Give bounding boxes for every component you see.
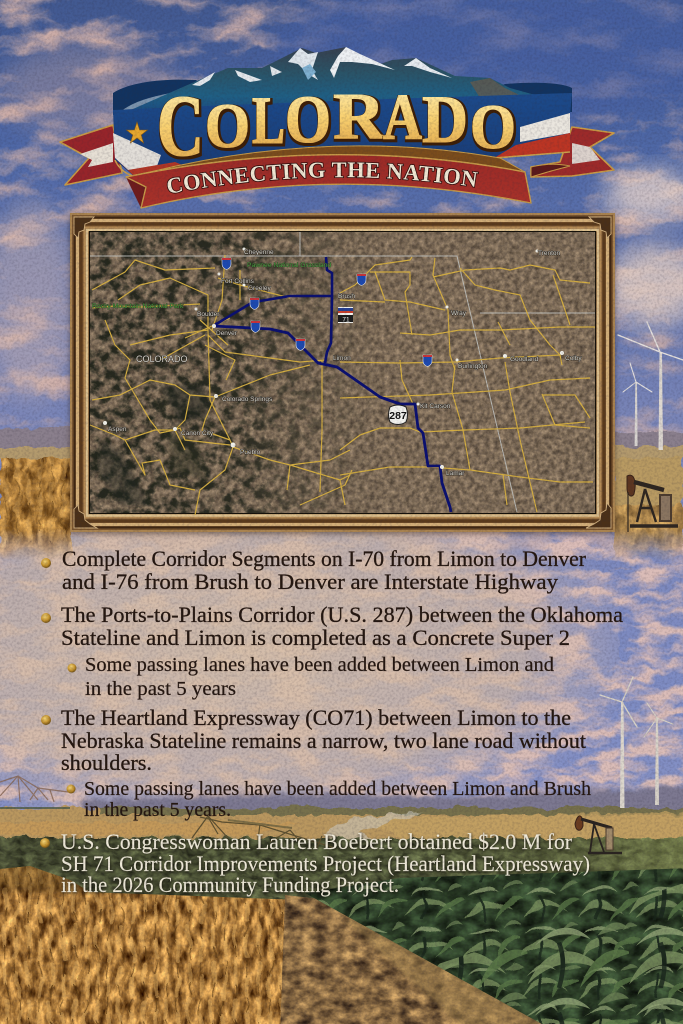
bullet 3: Heartland Expressway [41,705,586,775]
left ribbon tail [60,125,122,185]
map place labels: Colorado Springs [222,396,273,403]
blue highway route: I-70 and U.S. 287 [213,326,451,512]
yellow road network [90,255,595,515]
irrigation pivot: left [0,776,70,808]
bullet 1: corridor segments: and I-76 from Brush to Denver are Interstate Highway [62,569,558,594]
sub-bullet: passing lanes, Brush [66,778,591,821]
sub-bullet: passing lanes, Limon: in the past 5 years [85,678,236,700]
interstate shields [222,258,432,366]
map place labels: Kit Carson [420,403,451,410]
ribbon front bands [113,93,572,177]
subtitle ribbon [125,154,532,209]
bullet 4: Congressional funding: U.S. Congresswoman Lauren Boebert obtained $2.0 M for [61,829,573,854]
bullet 3: Heartland Expressway: shoulders. [61,750,152,775]
map place labels: Wray [451,310,467,317]
satellite terrain [90,232,595,513]
bullet 3: Heartland Expressway: The Heartland Expressway (CO71) between Limon to the [61,705,571,730]
map place labels: Canon City [181,430,214,437]
bullet 1: corridor segments [41,546,587,594]
distant hills [0,426,683,450]
map place labels: Denver [216,330,238,337]
map place labels: Pueblo [240,449,261,456]
map place labels: Lamar [446,470,465,477]
CO 71 route sign [338,307,353,324]
mountain [124,47,560,113]
title text: COLORADO: O [470,91,516,162]
U.S. 287 route shield [388,405,408,424]
pump jack: upper right [627,475,678,532]
bullet 4: Congressional funding: SH 71 Corridor Improvements Project (Heartland Expressway) [61,851,590,876]
map place labels: Brush [338,293,355,300]
bullet 4: Congressional funding [40,829,590,897]
sub-bullet: passing lanes, Brush: in the past 5 years. [84,799,231,821]
map place labels: Rocky Mountain National Park [92,303,184,310]
map place labels: Pawnee National Grassland [247,262,331,269]
frame corner ornaments [74,217,611,528]
blue highway route: I-76 and CO 71 [213,257,332,363]
bullet 1: corridor segments: Complete Corridor Segments on I-70 from Limon to Denver [62,546,587,571]
star icon [126,122,148,143]
title text: COLORADO: L [252,82,285,158]
title text: COLORADO [157,78,516,175]
CO 71 route sign: 71 [342,316,350,324]
sub-bullet: passing lanes, Limon [68,654,554,700]
upper wheat fields [0,458,683,560]
ribbon back curls [113,80,572,115]
title text: COLORADO: C [157,78,204,175]
subtitle text: CONNECTING THE NATION [166,162,479,194]
city markers [103,248,564,469]
map place labels: Boulder [197,311,220,318]
U.S. 287 route shield: 287 [389,410,407,422]
title banner [59,47,615,209]
bullet 2: Ports-to-Plains: Stateline and Limon is completed as a Concrete Super 2 [61,625,570,650]
irrigation pivot: center [192,816,335,850]
bullet 2: Ports-to-Plains: The Ports-to-Plains Corridor (U.S. 287) between the Oklahoma [61,602,623,627]
dirt path [280,895,542,1024]
right ribbon tail [531,127,614,177]
lower land [0,808,683,870]
map panel with ornate frame [70,213,615,532]
map place labels: Cheyenne [244,249,274,256]
map place labels: COLORADO [136,354,188,364]
corn field [300,865,683,1024]
map place labels: Goodland [510,356,539,363]
title text: COLORADO: O [205,90,250,161]
bullet 2: Ports-to-Plains [41,602,623,650]
title text: COLORADO: A [383,81,422,154]
wind turbines: lower right [600,677,673,808]
sub-bullet: passing lanes, Brush: Some passing lanes have been added between Limon and Brush [84,778,591,800]
map place labels: Colby [565,355,582,362]
map place labels: Trenton [538,250,561,257]
map place labels: Limon [333,355,351,362]
state border lines [90,232,595,512]
gold band [126,146,525,177]
title text: COLORADO: D [422,81,468,157]
map place labels: Burlington [458,363,488,370]
map place labels [92,249,582,477]
sub-bullet: passing lanes, Limon: Some passing lanes have been added between Limon and [85,654,554,676]
bullet 3: Heartland Expressway: Nebraska Stateline remains a narrow, two lane road without [61,728,586,753]
title text: COLORADO: R [333,80,386,153]
pump jack: lower field [575,816,622,853]
title text: COLORADO: O [285,81,331,157]
bullet 4: Congressional funding: in the 2026 Community Funding Project. [61,872,399,897]
map place labels: Greeley [248,285,272,292]
map place labels: Fort Collins [221,278,255,285]
wheat field [0,866,285,1024]
picture frame [70,213,615,532]
bullet list [40,546,623,897]
map place labels: Aspen [108,426,127,433]
wind turbines: upper right [618,322,683,450]
